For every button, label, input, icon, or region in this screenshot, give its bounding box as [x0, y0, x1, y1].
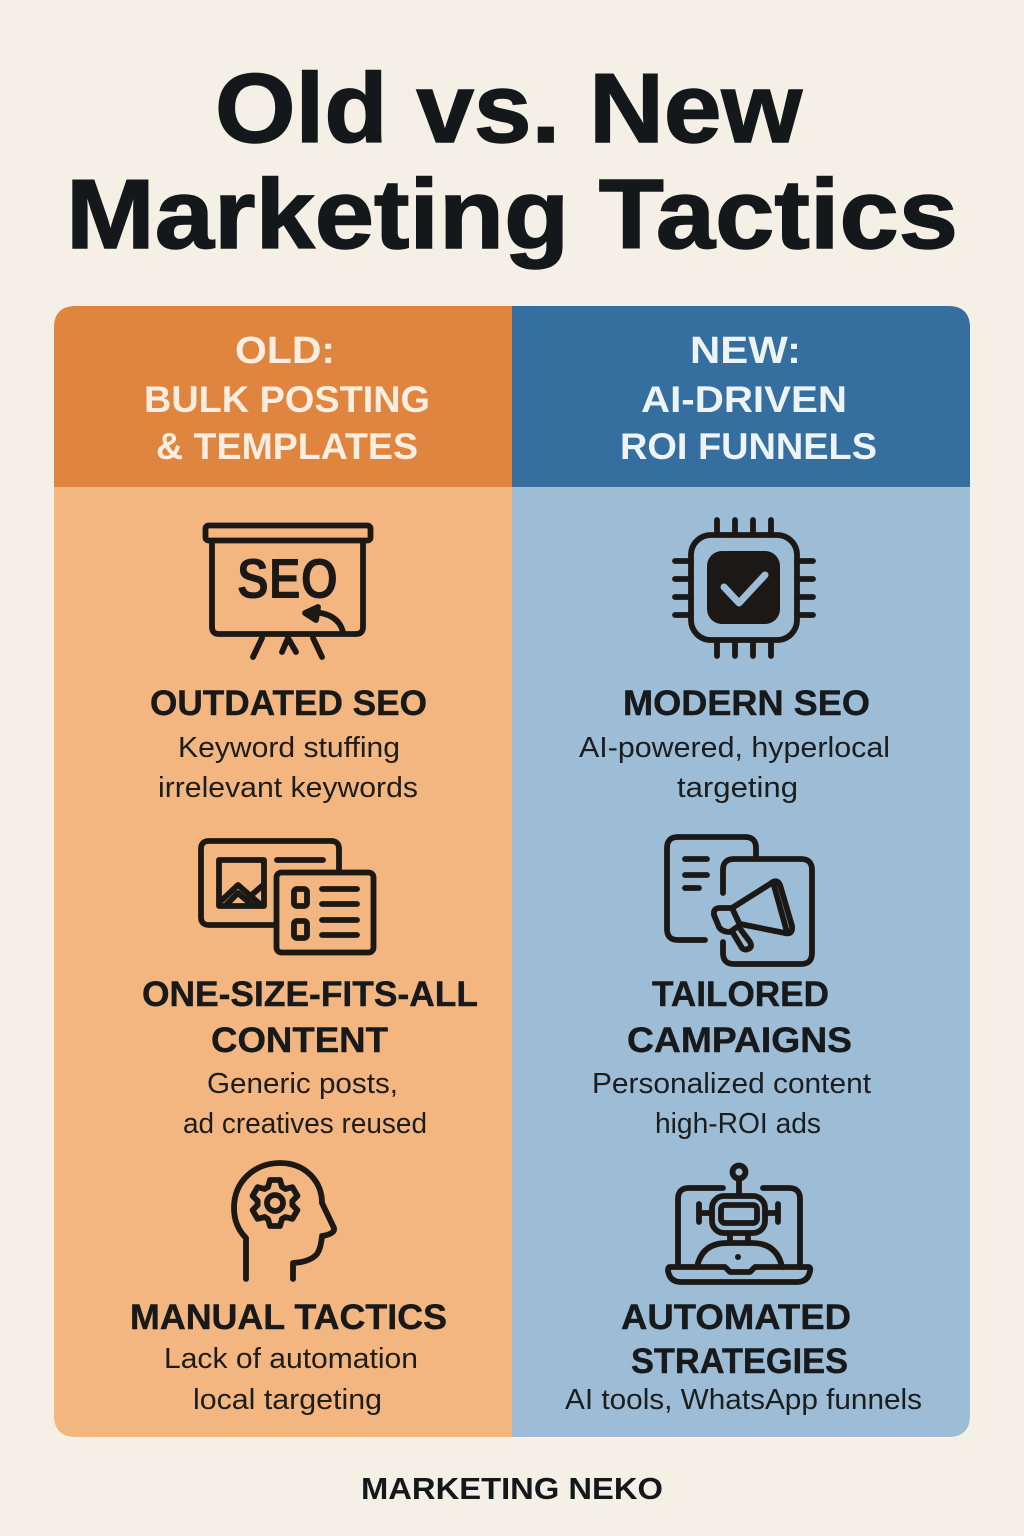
icon: SEO presentation board: [206, 526, 370, 657]
item: one-size-fits-all content: CONTENT: [211, 1021, 388, 1060]
item: outdated SEO: OUTDATED SEO: [150, 684, 427, 723]
item: outdated SEO: irrelevant keywords: [158, 772, 418, 804]
item: manual tactics: MANUAL TACTICS: [130, 1298, 447, 1337]
item: one-size-fits-all content: Generic posts,: [207, 1068, 398, 1100]
item: outdated SEO: Keyword stuffing: [178, 732, 400, 764]
icon: document and megaphone: [667, 837, 812, 964]
title: Old vs. New: [215, 53, 803, 163]
icon: generic content cards: [201, 841, 374, 952]
title: [66, 53, 958, 269]
item: automated strategies: STRATEGIES: [631, 1342, 848, 1381]
item: modern SEO: targeting: [677, 772, 798, 804]
icon: robot on laptop: [668, 1166, 810, 1282]
new column header: AI-DRIVEN: [641, 379, 847, 420]
item: outdated SEO: [150, 684, 427, 804]
title: Marketing Tactics: [66, 159, 958, 269]
item: tailored campaigns: CAMPAIGNS: [627, 1021, 852, 1060]
old column header: [54, 306, 512, 487]
item: modern SEO: [579, 684, 890, 804]
old column header: BULK POSTING: [144, 379, 430, 420]
item: manual tactics: Lack of automation: [164, 1343, 418, 1375]
icon: AI chip with check: [675, 520, 813, 656]
item: modern SEO: AI-powered, hyperlocal: [579, 732, 890, 764]
old column header: OLD:: [235, 330, 335, 372]
old column header: & TEMPLATES: [156, 426, 418, 467]
new column header: [512, 306, 970, 487]
item: tailored campaigns: high-ROI ads: [655, 1108, 821, 1140]
new column header: NEW:: [690, 330, 801, 372]
panel: old column: [54, 306, 512, 1437]
panel: new column: [512, 306, 970, 1437]
item: manual tactics: local targeting: [193, 1384, 382, 1416]
item: tailored campaigns: [592, 975, 871, 1140]
item: one-size-fits-all content: ad creatives reused: [183, 1108, 427, 1140]
item: tailored campaigns: Personalized content: [592, 1068, 871, 1100]
item: automated strategies: AUTOMATED: [621, 1298, 851, 1337]
item: automated strategies: [565, 1298, 922, 1416]
item: one-size-fits-all content: ONE-SIZE-FITS-ALL: [142, 975, 478, 1014]
footer brand: MARKETING NEKO: [361, 1471, 663, 1506]
item: automated strategies: AI tools, WhatsApp funnels: [565, 1384, 922, 1416]
icon: head with gear: [234, 1163, 334, 1279]
item: manual tactics: [130, 1298, 447, 1416]
new column header: ROI FUNNELS: [620, 426, 877, 467]
item: one-size-fits-all content: [142, 975, 478, 1140]
item: tailored campaigns: TAILORED: [652, 975, 829, 1014]
icon: SEO presentation board: SEO: [237, 547, 338, 611]
item: modern SEO: MODERN SEO: [623, 684, 870, 723]
